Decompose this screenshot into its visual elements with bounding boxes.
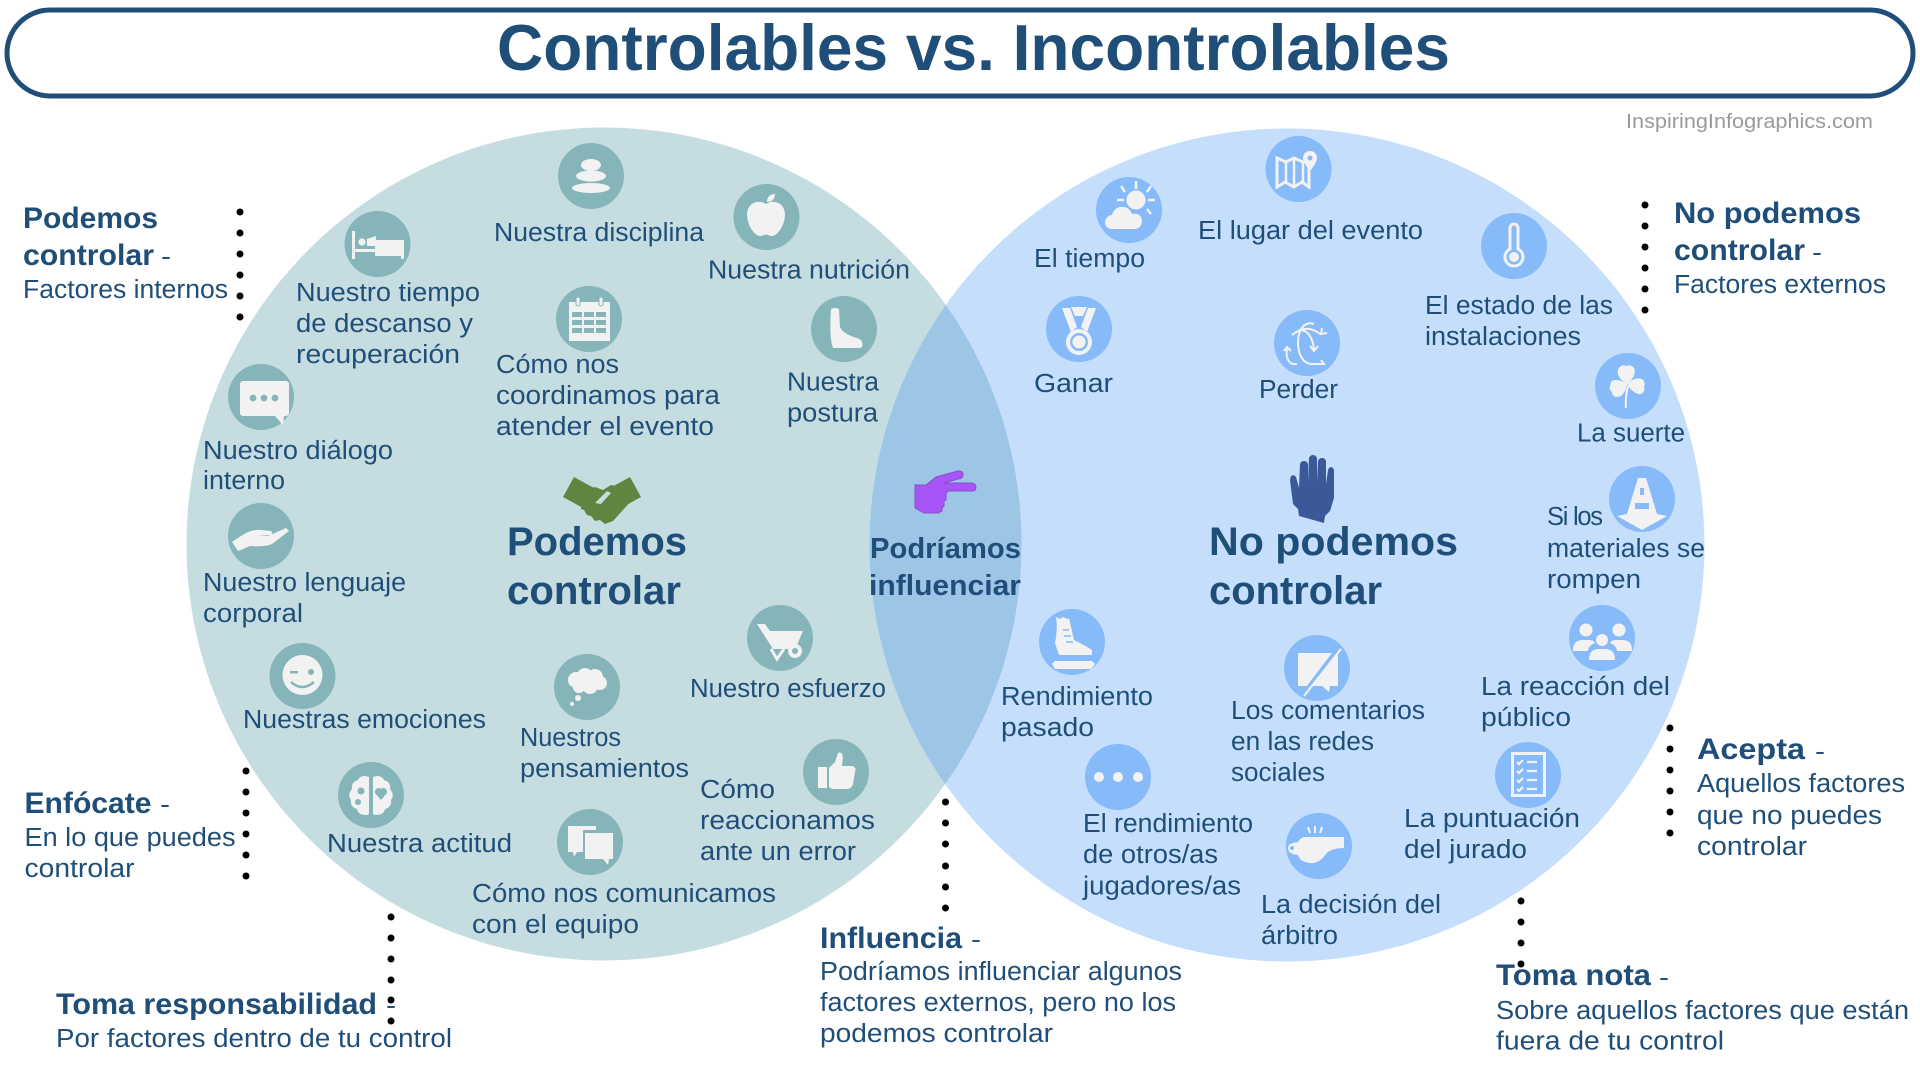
venn circle: no podemos controlar [870,128,1704,962]
callout: enfócate: Enfócate [24,787,152,820]
callout: acepta: Acepta [1697,733,1805,766]
item: el tiempo [1034,177,1162,273]
item: la reacción del público: La reacción del [1481,673,1670,701]
callout: acepta: que no puedes [1697,802,1882,830]
item: cómo nos comunicamos [472,809,776,939]
item: el lugar del evento [1198,136,1423,245]
item: la decisión del árbitro: árbitro [1261,922,1338,950]
item: si los materiales se rompen: Si los [1547,503,1603,531]
item: los comentarios en las redes: sociales [1231,759,1325,787]
item: la puntuación del jurado: del jurado [1404,836,1527,864]
callout: enfócate: En lo que puedes [24,824,236,852]
website credit: InspiringInfographics.com [1626,110,1873,133]
item: rendimiento pasado: Rendimiento [1001,683,1153,711]
item: nuestra nutrición: Nuestra nutrición [708,256,910,284]
item: el estado de las instalaciones [1425,213,1613,351]
callout: toma responsabilidad: Por factores dentro de tu control [56,1025,452,1053]
item: los comentarios en las redes [1231,635,1425,787]
callout: no podemos controlar factores externos: Factores externos [1674,271,1886,299]
item: nuestros pensamientos [520,654,689,783]
item: el lugar del evento: El lugar del evento [1198,217,1423,245]
callout: podemos controlar factores internos: Podemos [23,202,158,235]
panel: podríamos influenciar: influenciar [869,570,1021,602]
item: el rendimiento de otros: El rendimiento [1083,810,1253,838]
item: nuestro diálogo interno [203,364,393,495]
title banner: Controlables vs. Incontrolables [497,11,1450,84]
item: nuestro lenguaje corporal: corporal [203,600,303,628]
item: nuestra postura: Nuestra [787,368,880,396]
item: si los materiales se rompen: rompen [1547,566,1641,594]
item: la puntuación del jurado [1404,742,1580,864]
item: la suerte: La suerte [1577,420,1685,448]
callout: podemos controlar factores internos: controlar [23,239,154,272]
item: el rendimiento de otros: de otros/as [1083,841,1218,869]
title banner [7,10,1913,96]
callout: toma responsabilidad [56,988,452,1053]
venn overlap: podríamos influenciar [870,305,1022,784]
callout: toma nota: Toma nota [1496,959,1651,992]
item: cómo nos coordinamos [496,286,721,441]
icon: pointing hand [915,471,976,513]
item: nuestra postura: postura [787,400,879,428]
item: cómo nos coordinamos: atender el evento [496,413,714,441]
item: nuestro lenguaje corporal: Nuestro lenguaje [203,569,406,597]
callout: podemos controlar factores internos: Factores internos [23,276,228,304]
item: nuestros pensamientos: Nuestros [520,724,621,752]
callout: influencia: podemos controlar [820,1020,1054,1048]
callout: acepta: - [1815,738,1825,766]
item: nuestra actitud [327,762,512,858]
dotted connectors [236,202,1674,1024]
callout: toma nota [1496,959,1909,1056]
panel: podemos controlar items [203,143,910,939]
heading: podemos controlar [507,477,687,613]
item: nuestro tiempo de descanso: Nuestro tiempo [296,279,480,307]
item: la reacción del público: público [1481,704,1571,732]
item: la suerte [1577,353,1685,448]
panel: podríamos influenciar: Podríamos [870,533,1021,565]
item: nuestra nutrición [708,184,910,284]
item: la decisión del árbitro [1261,813,1441,950]
heading: no podemos controlar [1209,455,1458,613]
callout: acepta: controlar [1697,833,1808,861]
item: rendimiento pasado: pasado [1001,714,1094,742]
item: la reacción del público [1481,605,1670,732]
item: cómo nos coordinamos: Cómo nos [496,351,619,379]
item: cómo nos comunicamos: con el equipo [472,911,639,939]
item: cómo reaccionamos ante un error: reaccionamos [700,807,875,835]
callout: influencia: - [971,926,981,954]
heading: no podemos controlar: controlar [1209,569,1382,613]
callout: acepta [1697,733,1905,861]
callout: no podemos controlar factores externos [1674,197,1886,299]
callout: enfócate: controlar [24,855,135,883]
item: nuestro esfuerzo [690,605,886,703]
panel: no podemos controlar items [1001,136,1705,950]
item: cómo nos comunicamos: Cómo nos comunicamos [472,880,776,908]
callout: podemos controlar factores internos [23,202,228,304]
callout: acepta: Aquellos factores [1697,770,1905,798]
item: los comentarios en las redes: en las redes [1231,728,1374,756]
item: nuestras emociones: Nuestras emociones [243,706,486,734]
item: nuestro tiempo de descanso [296,211,480,369]
item: el estado de las instalaciones: El estado de las [1425,292,1613,320]
item: cómo reaccionamos ante un error: Cómo [700,776,775,804]
icon: handshake [563,477,641,524]
item: nuestras emociones [243,643,486,734]
callout: influencia: Influencia [820,922,962,955]
callout: influencia [820,922,1182,1048]
item: nuestro diálogo interno: interno [203,467,285,495]
item: nuestra postura [787,296,880,428]
callout: podemos controlar factores internos: - [161,243,171,271]
item: nuestro lenguaje corporal [203,503,406,628]
item: ganar: Ganar [1034,370,1114,398]
item: cómo reaccionamos ante un error [700,739,875,866]
item: nuestro tiempo de descanso: recuperación [296,341,460,369]
venn circle: podemos controlar [186,128,1022,960]
callout: enfócate [24,787,236,883]
callout: no podemos controlar factores externos: controlar [1674,234,1805,267]
item: perder [1259,310,1340,404]
item: cómo reaccionamos ante un error: ante un error [700,838,857,866]
item: la decisión del árbitro: La decisión del [1261,891,1441,919]
callout: toma nota: Sobre aquellos factores que están [1496,997,1909,1025]
item: perder: Perder [1259,376,1339,404]
item: si los materiales se rompen: materiales se [1547,535,1705,563]
item: cómo nos coordinamos: coordinamos para [496,382,721,410]
item: nuestra disciplina [494,143,705,247]
item: nuestro esfuerzo: Nuestro esfuerzo [690,675,886,703]
item: la puntuación del jurado: La puntuación [1404,805,1580,833]
item: rendimiento pasado [1001,609,1153,742]
heading: podemos controlar: Podemos [507,520,687,564]
icon: stop hand [1290,455,1334,523]
item: si los materiales se rompen [1547,466,1705,594]
callout: toma nota: fuera de tu control [1496,1028,1724,1056]
callout: toma responsabilidad: - [386,992,396,1020]
callout: influencia: factores externos, pero no los [820,989,1176,1017]
item: el estado de las instalaciones: instalaciones [1425,323,1581,351]
item: nuestra disciplina: Nuestra disciplina [494,219,705,247]
item: el rendimiento de otros [1082,744,1253,900]
item: el tiempo: El tiempo [1034,245,1145,273]
callout: enfócate: - [160,791,170,819]
item: el rendimiento de otros: jugadores/as [1082,872,1241,900]
callout: no podemos controlar factores externos: - [1812,239,1822,267]
item: nuestro tiempo de descanso: de descanso y [296,310,473,338]
item: nuestro diálogo interno: Nuestro diálogo [203,437,393,465]
heading: podemos controlar: controlar [507,569,681,613]
callout: toma nota: - [1659,964,1669,992]
callout: toma responsabilidad: Toma responsabilidad [56,988,377,1021]
heading: no podemos controlar: No podemos [1209,520,1458,564]
item: nuestra actitud: Nuestra actitud [327,830,512,858]
panel: podríamos influenciar [869,471,1021,602]
callout: influencia: Podríamos influenciar algunos [820,958,1182,986]
callout: no podemos controlar factores externos: No podemos [1674,197,1861,230]
item: nuestros pensamientos: pensamientos [520,755,689,783]
item: ganar [1034,296,1114,398]
item: los comentarios en las redes: Los comentarios [1231,697,1425,725]
